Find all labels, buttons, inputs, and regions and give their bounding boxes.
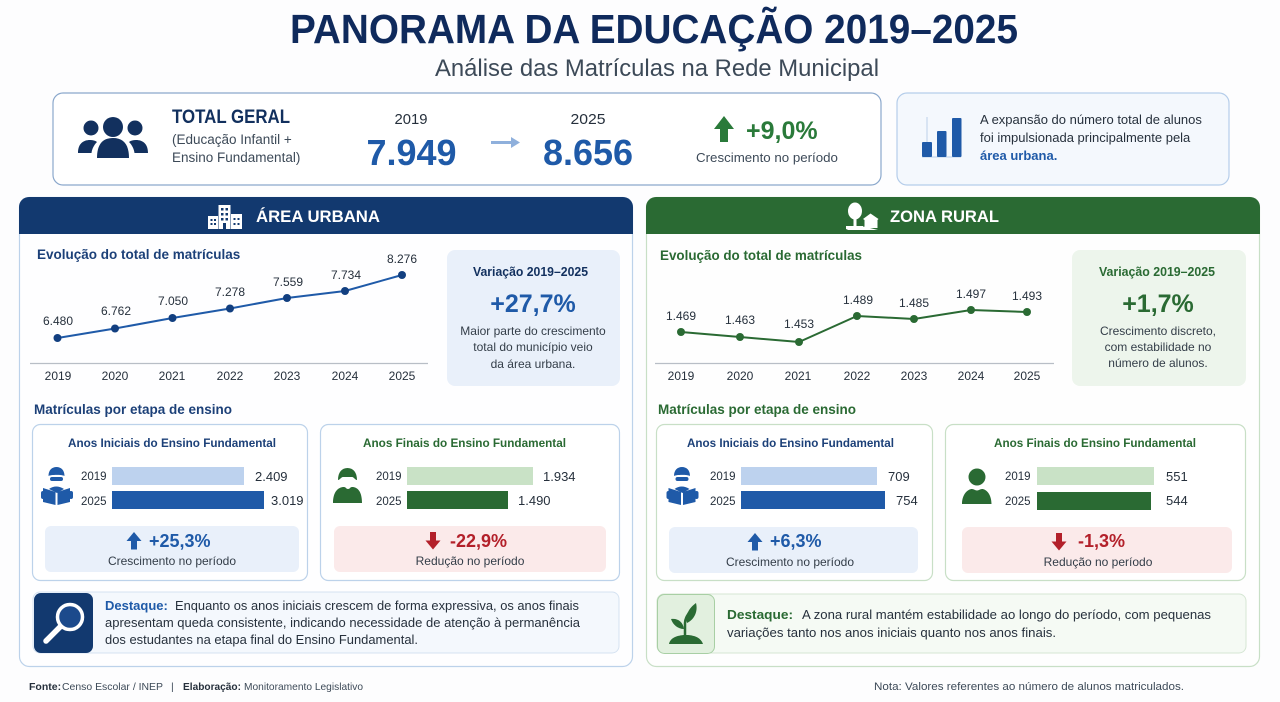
callout: destaque <box>657 594 1246 654</box>
card: anos finais <box>946 424 1246 580</box>
card: variation: total do município veio <box>473 340 593 354</box>
callout: reduction <box>334 526 606 572</box>
icon: reader <box>666 467 698 505</box>
card: anos iniciais: 2019 <box>710 471 736 483</box>
icon: tree and house <box>846 202 878 230</box>
footer: source <box>29 681 363 693</box>
card: variation: Crescimento discreto, <box>1100 324 1216 338</box>
icon: group of people <box>78 117 148 158</box>
line chart: 8.276 <box>387 252 417 266</box>
panel: area urbana <box>19 197 633 666</box>
card: anos finais: 551 <box>1166 469 1188 484</box>
header: ÁREA URBANA <box>256 207 380 226</box>
card: anos finais: 2025 <box>376 496 402 508</box>
value: 2019: 7.949 <box>366 132 457 173</box>
callout: destaque: A zona rural mantém estabilidade ao longo do período, com pequenas <box>802 607 1212 622</box>
callout: destaque: Enquanto os anos iniciais crescem de forma expressiva, os anos finais <box>175 598 579 613</box>
line chart: 2025 <box>1014 369 1041 383</box>
card: variation: Maior parte do crescimento <box>460 324 606 338</box>
text: A expansão do número total de alunos <box>980 112 1202 127</box>
card: anos finais: 1.490 <box>518 493 551 508</box>
card: variation: número de alunos. <box>1108 356 1208 370</box>
subtitle: Análise das Matrículas na Rede Municipal <box>435 55 879 82</box>
line chart: 7.278 <box>215 285 245 299</box>
line chart: 2019 <box>668 369 695 383</box>
line chart: 2020 <box>727 369 754 383</box>
arrow <box>491 137 520 148</box>
icon: buildings <box>208 205 242 229</box>
footer: source: Monitoramento Legislativo <box>244 681 363 693</box>
line chart: 2023 <box>274 369 301 383</box>
card: anos iniciais: 3.019 <box>271 493 304 508</box>
icon: reader <box>41 467 73 505</box>
line chart <box>655 287 1054 383</box>
callout: destaque: variações tanto nos anos iniciais quanto nos anos finais. <box>727 625 1056 640</box>
header <box>19 197 633 234</box>
card: anos iniciais: 754 <box>896 493 918 508</box>
line chart: 1.453 <box>784 317 814 331</box>
callout: reduction <box>962 527 1232 573</box>
growth <box>696 116 838 165</box>
line chart: 2023 <box>901 369 928 383</box>
footer: source: Fonte: <box>29 681 61 693</box>
callout: growth: +25,3% <box>149 531 211 551</box>
panel: total geral <box>53 93 881 185</box>
callout: reduction: Redução no período <box>1044 555 1153 569</box>
line chart: 1.489 <box>843 293 873 307</box>
card: anos finais: 2019 <box>1005 471 1031 483</box>
header: ZONA RURAL <box>890 207 999 226</box>
card: anos iniciais: 2019 <box>81 471 107 483</box>
callout: reduction: -1,3% <box>1078 531 1125 551</box>
card: variation: +1,7% <box>1122 290 1194 318</box>
note: scope: Ensino Fundamental) <box>172 150 300 165</box>
line chart: 1.463 <box>725 313 755 327</box>
callout: growth: Crescimento no período <box>108 554 236 568</box>
line chart: 1.485 <box>899 296 929 310</box>
card: variation <box>447 250 620 386</box>
line chart: 6.480 <box>43 314 73 328</box>
value: 2025: 8.656 <box>543 132 633 173</box>
value: 2025: 2025 <box>570 111 606 128</box>
footer: source: Elaboração: <box>183 681 241 693</box>
line chart: 2021 <box>785 369 812 383</box>
line chart: 1.497 <box>956 287 986 301</box>
card: anos iniciais: 2.409 <box>255 469 288 484</box>
icon: bar chart <box>922 117 962 157</box>
line chart: 2022 <box>844 369 871 383</box>
callout: destaque: Destaque: <box>727 607 793 622</box>
line chart: 2024 <box>332 369 359 383</box>
card: variation: Variação 2019–2025 <box>473 265 588 279</box>
line chart <box>30 252 428 383</box>
card: anos iniciais <box>32 424 308 580</box>
line chart: 1.493 <box>1012 289 1042 303</box>
callout: reduction: -22,9% <box>450 531 507 551</box>
card: anos finais: 2025 <box>1005 496 1031 508</box>
value: 2025 <box>543 111 633 173</box>
line chart: 2020 <box>102 369 129 383</box>
line chart: 2025 <box>389 369 416 383</box>
callout: destaque: apresentam queda consistente, indicando necessidade de atenção à permanência <box>105 615 581 630</box>
value: 2019: 2019 <box>394 111 428 128</box>
heading: evolution: Evolução do total de matrículas <box>660 248 862 263</box>
card: anos finais: 544 <box>1166 493 1188 508</box>
title: PANORAMA DA EDUCAÇÃO 2019–2025 <box>290 6 1018 52</box>
card: variation: +27,7% <box>490 290 576 318</box>
card: variation: com estabilidade no <box>1105 340 1212 354</box>
heading: stages: Matrículas por etapa de ensino <box>658 402 856 417</box>
panel: zona rural <box>646 197 1260 666</box>
header <box>646 197 1260 234</box>
line chart: 2024 <box>958 369 985 383</box>
line chart: 1.469 <box>666 309 696 323</box>
callout: reduction: Redução no período <box>416 554 525 568</box>
icon: student <box>333 468 362 503</box>
card: anos finais: 1.934 <box>543 469 576 484</box>
callout: destaque: Destaque: <box>105 598 168 613</box>
heading: total geral: TOTAL GERAL <box>172 107 290 128</box>
panel: insight <box>897 93 1229 185</box>
card: anos iniciais: Anos Iniciais do Ensino Fundamental <box>687 436 894 450</box>
line chart: 2019 <box>45 369 72 383</box>
callout: destaque: dos estudantes na etapa final do Ensino Fundamental. <box>105 632 418 647</box>
card: anos iniciais: Anos Iniciais do Ensino Fundamental <box>68 436 276 450</box>
value: 2019 <box>366 111 457 173</box>
text: área urbana. <box>980 148 1057 163</box>
note: scope: (Educação Infantil + <box>172 132 292 147</box>
callout: growth: Crescimento no período <box>726 555 854 569</box>
card: anos iniciais <box>656 424 932 580</box>
growth: Crescimento no período <box>696 150 838 165</box>
icon: sprout <box>658 594 714 654</box>
card: anos iniciais: 2025 <box>81 496 107 508</box>
text: foi impulsionada principalmente pela <box>980 130 1191 145</box>
footer: source: | <box>171 681 174 693</box>
callout: growth <box>669 527 918 573</box>
growth: +9,0% <box>746 117 818 145</box>
footer: note: Nota: Valores referentes ao número de alunos matriculados. <box>874 681 1184 693</box>
icon: student <box>962 468 992 504</box>
line chart: 6.762 <box>101 304 131 318</box>
card: variation: da área urbana. <box>491 357 575 371</box>
line chart: 7.559 <box>273 275 303 289</box>
callout: destaque <box>33 592 619 653</box>
heading: evolution: Evolução do total de matrículas <box>37 247 240 262</box>
icon: magnifier <box>34 593 93 653</box>
card: anos finais: Anos Finais do Ensino Fundamental <box>994 436 1196 450</box>
card: variation: Variação 2019–2025 <box>1099 265 1215 279</box>
card: anos iniciais: 709 <box>888 469 910 484</box>
card: anos finais <box>320 424 620 580</box>
heading: stages: Matrículas por etapa de ensino <box>34 402 232 417</box>
card: anos iniciais: 2025 <box>710 496 736 508</box>
card: anos finais: 2019 <box>376 471 402 483</box>
line chart: 2021 <box>159 369 186 383</box>
footer: source: Censo Escolar / INEP <box>62 681 163 693</box>
line chart: 2022 <box>217 369 244 383</box>
callout: growth <box>45 526 299 572</box>
card: variation <box>1072 250 1246 386</box>
line chart: 7.050 <box>158 294 188 308</box>
callout: growth: +6,3% <box>770 531 822 551</box>
card: anos finais: Anos Finais do Ensino Fundamental <box>363 436 566 450</box>
line chart: 7.734 <box>331 268 361 282</box>
